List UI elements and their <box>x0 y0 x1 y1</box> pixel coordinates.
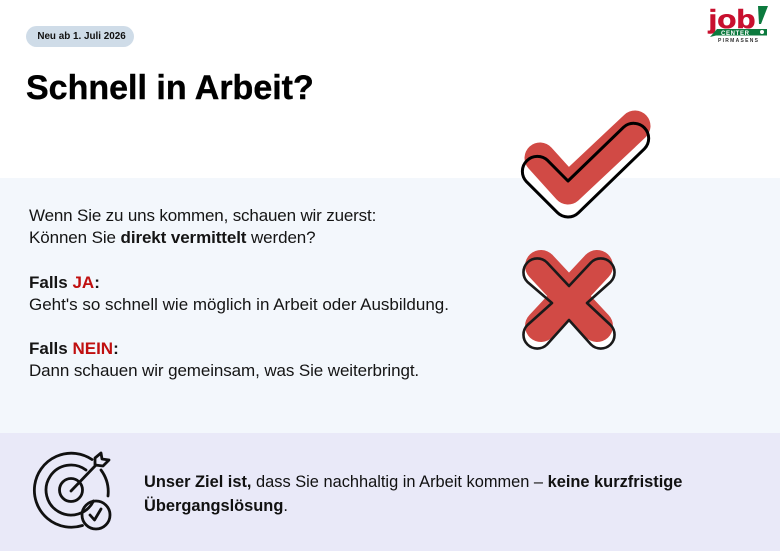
text block: if no: Falls NEIN: <box>29 339 119 358</box>
icon: cross mark <box>522 250 616 350</box>
logo: job center Pirmasens: job <box>707 4 756 34</box>
text block: intro <box>29 206 376 247</box>
icon: check mark <box>520 110 650 218</box>
logo: job center Pirmasens: PIRMASENS <box>718 38 759 44</box>
title: Schnell in Arbeit? <box>26 69 314 107</box>
icon: target with arrow and check <box>32 452 112 530</box>
text block: if no: Dann schauen wir gemeinsam, was Sie weiterbringt. <box>29 361 419 380</box>
badge: new from date <box>26 26 134 47</box>
text block: goal statement: Übergangslösung. <box>144 497 288 515</box>
text block: intro: Wenn Sie zu uns kommen, schauen wir zuerst: <box>29 206 376 225</box>
text block: if no <box>29 339 419 380</box>
text block: goal statement <box>144 473 682 515</box>
logo: job center Pirmasens <box>707 4 768 44</box>
logo: job center Pirmasens: CENTER <box>721 31 750 37</box>
text block: intro: Können Sie direkt vermittelt werden? <box>29 228 316 247</box>
panel: goal background <box>0 433 780 551</box>
text block: if yes: Falls JA: <box>29 273 100 292</box>
badge: new from date: Neu ab 1. Juli 2026 <box>37 31 126 42</box>
panel: main content background <box>0 178 780 433</box>
text block: if yes: Geht's so schnell wie möglich in Arbeit oder Ausbildung. <box>29 295 449 314</box>
text block: goal statement: Unser Ziel ist, dass Sie nachhaltig in Arbeit kommen – keine kurzfristige <box>144 473 682 491</box>
text block: if yes <box>29 273 449 314</box>
